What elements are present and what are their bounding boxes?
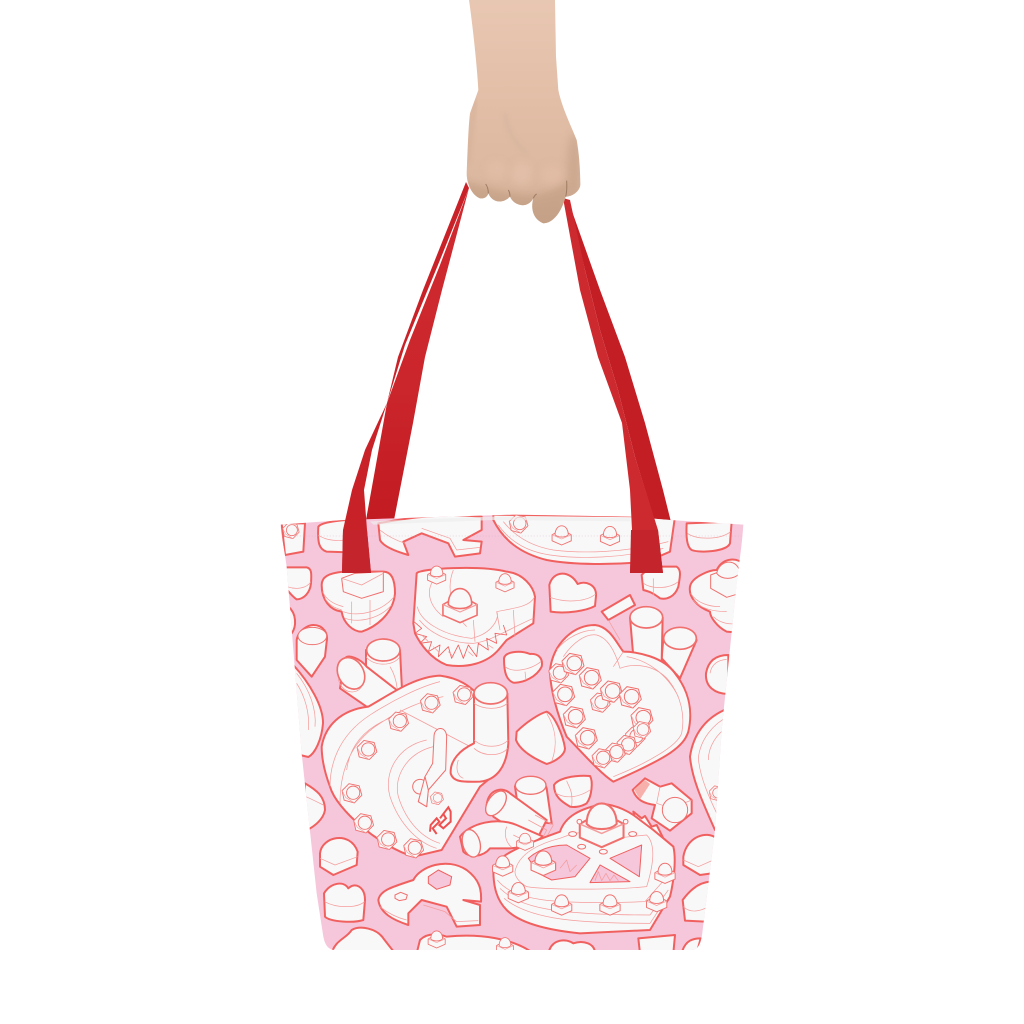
right big heart fragment: [690, 708, 728, 830]
window panes: [528, 845, 642, 883]
cap nut lower left: [320, 838, 358, 875]
top wrench: [378, 515, 482, 557]
gear heart: [413, 566, 535, 666]
heart lower right: [683, 882, 712, 922]
small lying heart: [554, 776, 592, 807]
seam stitching: [282, 535, 742, 537]
wide strap left: [366, 188, 469, 520]
hand and arm: [462, 0, 582, 230]
left pipe: [297, 625, 327, 677]
tote bag body with heart machinery pattern: [281, 515, 747, 955]
top heart fragment: [318, 520, 350, 552]
hand shading: [467, 103, 580, 224]
bag panel: [281, 515, 743, 950]
cap nut lower right: [683, 835, 717, 875]
top right heart fragment: [686, 522, 732, 552]
right under-strap heart: [642, 567, 680, 599]
arm and fist: [467, 0, 580, 223]
elbow pipe: [451, 683, 508, 782]
bolted heart pipes: [602, 595, 697, 678]
lower heart with window: [493, 803, 675, 933]
back strap right: [568, 200, 671, 522]
right circle fragment: [706, 655, 728, 694]
pipes by lower heart: [459, 776, 553, 859]
right layered heart with nut: [690, 560, 747, 633]
bottom row fragments: [332, 926, 702, 950]
left heart fragment: [285, 567, 311, 599]
top left nut fragment: [282, 523, 305, 555]
big heart pipes: [336, 638, 403, 706]
heart with many nuts: [549, 625, 690, 782]
small heart: [549, 574, 596, 612]
pattern: [282, 515, 747, 955]
heart-shaped socket nut: [516, 712, 565, 764]
left bottom heart fragment: [303, 783, 325, 829]
small tilted heart: [504, 652, 542, 683]
lever: [413, 729, 447, 807]
heart lower left: [324, 884, 365, 922]
icon: logo mark: [430, 807, 451, 834]
big heart with lever: [322, 676, 500, 858]
soft top hem: [370, 517, 630, 525]
hex bolt: [633, 778, 692, 831]
layered heart with nut: [322, 572, 395, 632]
top big heart fragment: [493, 515, 675, 564]
right front strap: [563, 198, 663, 573]
left front strap: [342, 182, 469, 573]
left big heart fragment: [288, 607, 323, 757]
wrench with hex hole: [378, 864, 481, 927]
